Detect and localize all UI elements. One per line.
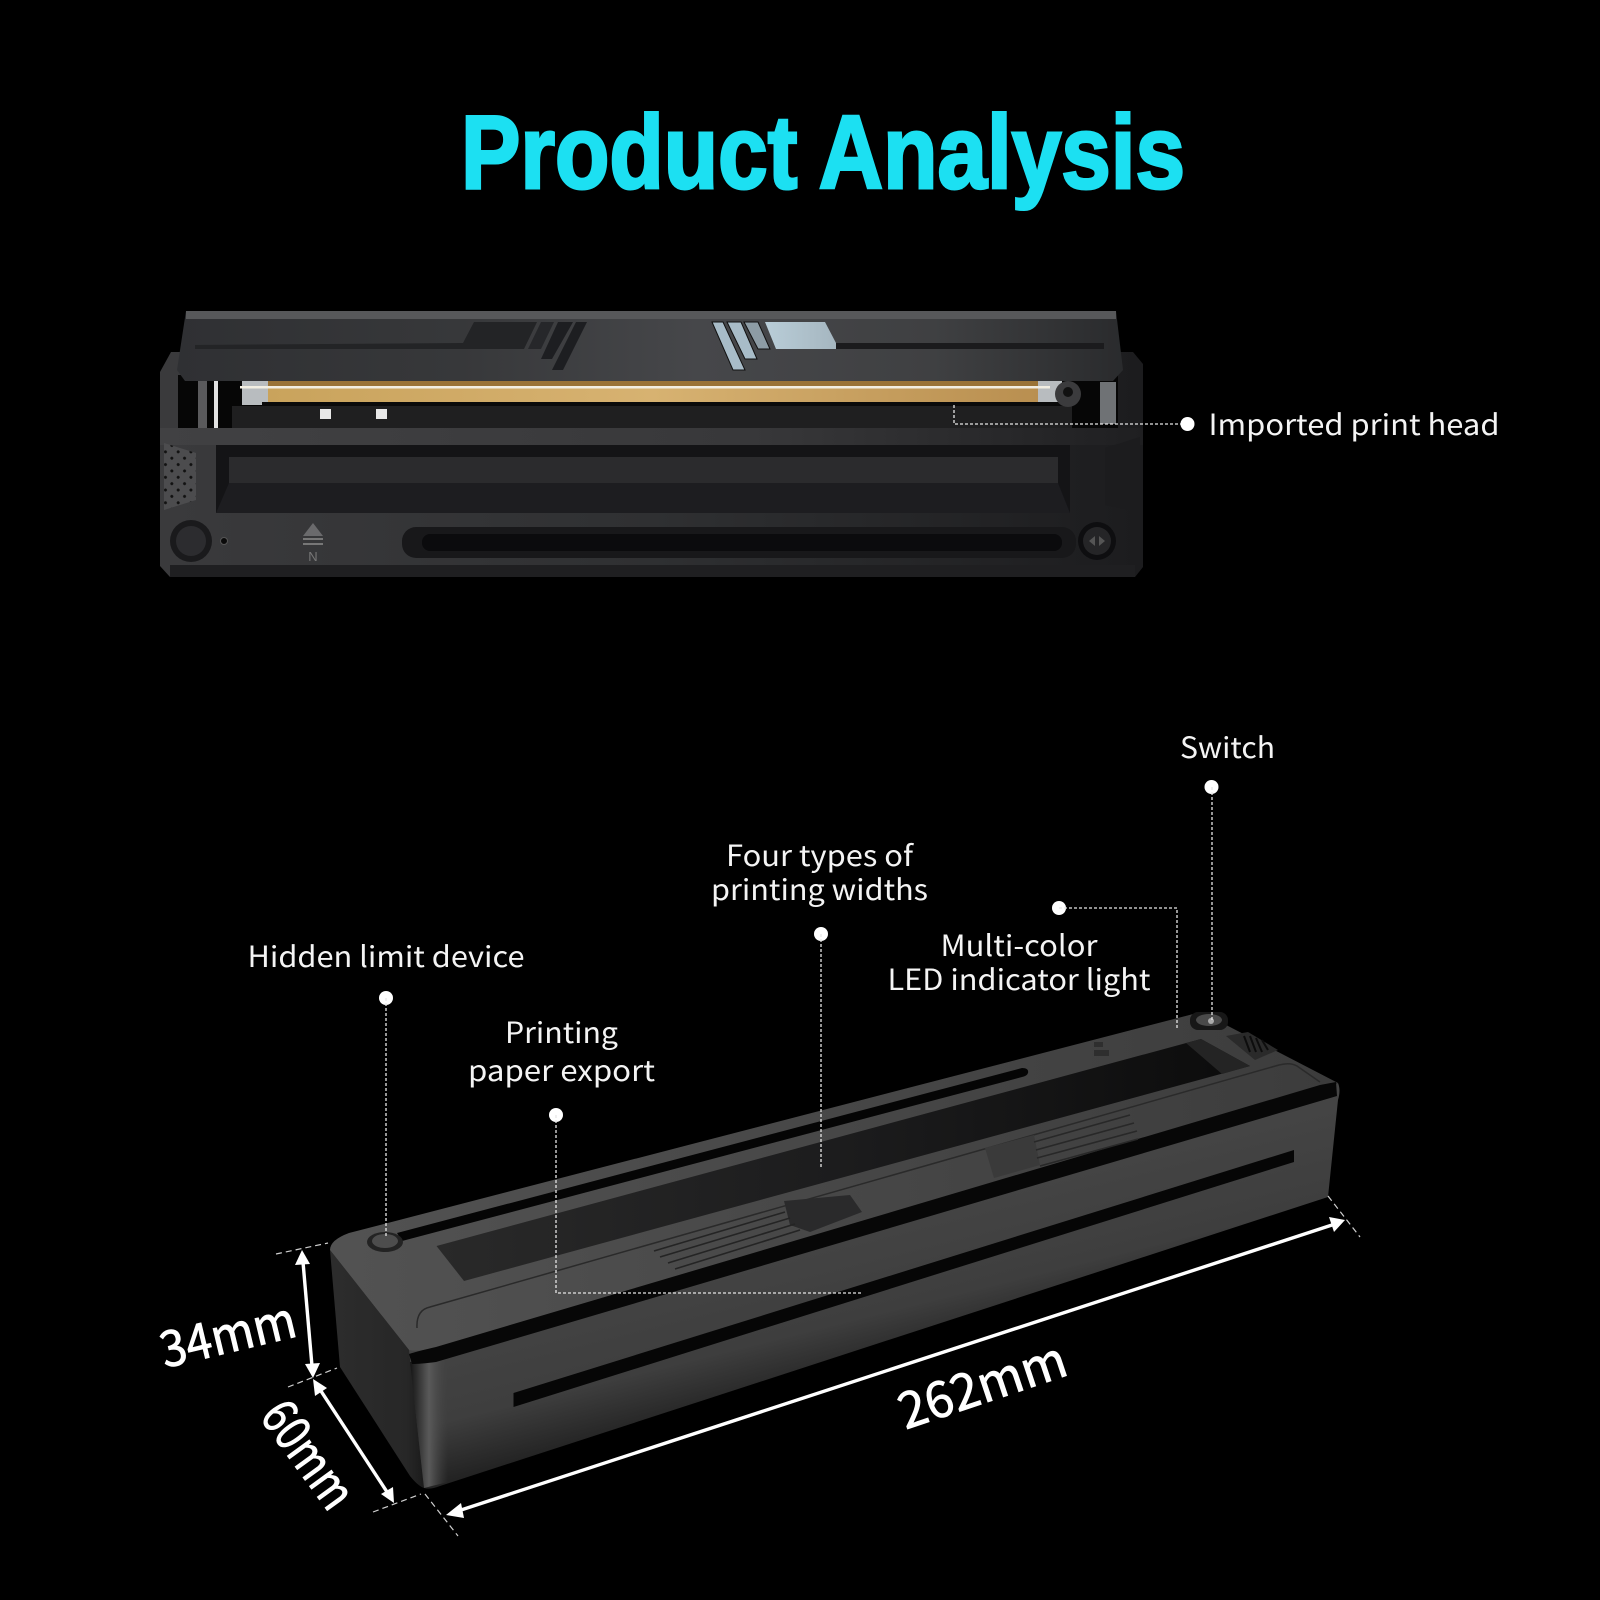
callout: hidden limit device xyxy=(248,934,524,1236)
callout: switch xyxy=(1180,725,1275,1020)
top face xyxy=(330,1012,1338,1351)
left side face xyxy=(330,1250,424,1488)
callout: switch: Switch xyxy=(1180,725,1275,767)
dimension: length 262mm: 262mm xyxy=(887,1320,1075,1444)
lid seam line xyxy=(417,1064,1320,1328)
lid xyxy=(177,311,1123,381)
front face xyxy=(409,1083,1340,1489)
side grille xyxy=(164,443,196,510)
right guide tab xyxy=(985,1115,1138,1178)
callout: imported print head: Imported print head xyxy=(1208,402,1500,444)
callout: printing paper export: paper export xyxy=(468,1048,655,1090)
right power button xyxy=(1190,1012,1228,1030)
front paper slot xyxy=(514,1150,1294,1407)
callout: imported print head xyxy=(954,402,1500,444)
recess xyxy=(216,445,1070,513)
callout: LED indicator: LED indicator light xyxy=(888,957,1151,999)
dimension: height 34mm: 34mm xyxy=(152,1280,303,1383)
inner wall xyxy=(1186,1039,1250,1074)
logo mark xyxy=(1094,1042,1109,1056)
left guide tab xyxy=(654,1195,862,1269)
dimension: length 262mm xyxy=(425,1196,1360,1536)
front corner sheen xyxy=(410,1355,448,1488)
left power button xyxy=(367,1232,403,1252)
callout: printing paper export: Printing xyxy=(505,1010,618,1052)
paper window xyxy=(436,1039,1250,1281)
callout: four types of printing widths: Four types of xyxy=(726,833,915,875)
printer base body xyxy=(160,352,1143,577)
power knob xyxy=(170,520,212,562)
guide slot xyxy=(402,527,1076,558)
indicator dot xyxy=(220,538,228,544)
dimension: depth 60mm: 60mm xyxy=(247,1383,375,1522)
width knob xyxy=(1078,522,1116,560)
title: Product Analysis xyxy=(461,95,1185,211)
vent wheel xyxy=(1226,1032,1278,1060)
callout: LED indicator xyxy=(888,901,1177,1030)
black seam xyxy=(409,1082,1337,1364)
paper direction icon xyxy=(303,523,323,564)
lower strip xyxy=(170,565,1135,577)
product photo: printer 3/4 view with dimensions xyxy=(330,1012,1340,1489)
callout: printing paper export xyxy=(468,1010,862,1293)
right side panel xyxy=(1105,437,1140,512)
base top strip xyxy=(160,428,1143,445)
callout: LED indicator: Multi-color xyxy=(940,923,1098,965)
opening with print head xyxy=(178,375,1118,428)
paper direction icon: N xyxy=(308,549,318,564)
callout: hidden limit device: Hidden limit device xyxy=(248,934,524,976)
dimension: height 34mm xyxy=(152,1243,337,1387)
callout: four types of printing widths xyxy=(711,833,928,1169)
top back slot xyxy=(397,1068,1028,1241)
callout: four types of printing widths: printing widths xyxy=(711,867,928,909)
product photo: printer with open lid xyxy=(160,311,1143,577)
